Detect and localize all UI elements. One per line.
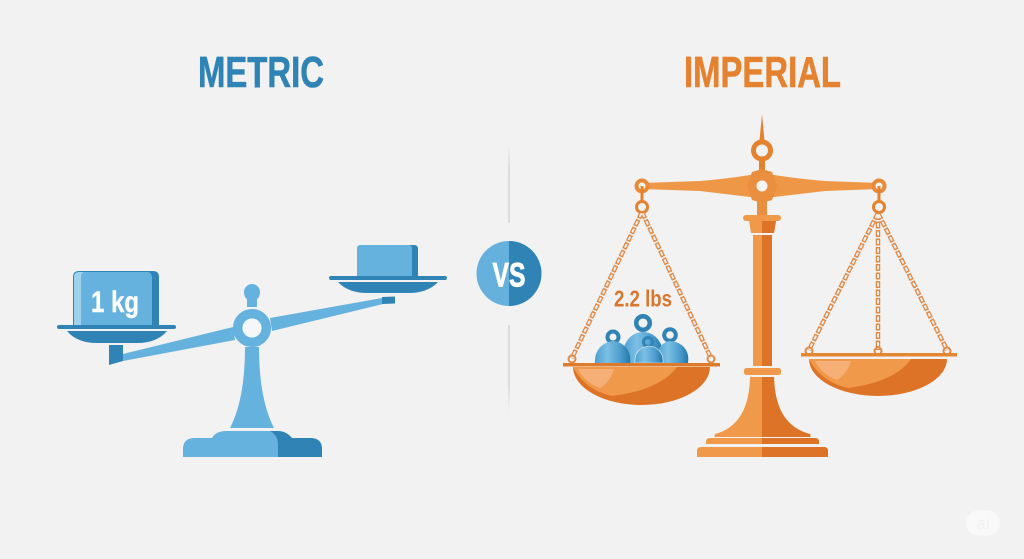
balance beam bbox=[636, 169, 884, 212]
scale knob bbox=[244, 284, 260, 307]
tilted beam bbox=[109, 296, 395, 365]
stand post bbox=[714, 198, 810, 437]
divider: lower bbox=[508, 325, 510, 413]
divider: upper bbox=[508, 143, 510, 223]
right pan bbox=[801, 353, 957, 396]
right pan bbox=[329, 276, 447, 293]
VS badge: VS bbox=[492, 256, 526, 294]
title: IMPERIAL: IMPERIAL bbox=[684, 48, 841, 97]
title: METRIC: METRIC bbox=[198, 48, 324, 97]
pivot ring bbox=[238, 314, 266, 342]
stand base bbox=[697, 438, 828, 457]
left pan bbox=[563, 363, 720, 405]
2.2 lbs label: 2.2 lbs bbox=[614, 286, 672, 312]
metric balance scale bbox=[57, 245, 447, 457]
scale base bbox=[183, 431, 322, 457]
blue weights bbox=[595, 316, 688, 363]
right block bbox=[357, 245, 418, 276]
watermark bbox=[966, 510, 1000, 536]
1 kg block bbox=[73, 271, 159, 325]
left pan chains bbox=[568, 212, 714, 362]
watermark: ai bbox=[976, 514, 990, 533]
spike and top ring bbox=[754, 114, 770, 174]
VS badge bbox=[476, 241, 542, 306]
imperial balance scale bbox=[563, 114, 957, 457]
1 kg block: 1 kg bbox=[91, 286, 139, 319]
scale post bbox=[230, 347, 274, 428]
right pan chains bbox=[806, 213, 950, 354]
left pan bbox=[57, 325, 176, 343]
